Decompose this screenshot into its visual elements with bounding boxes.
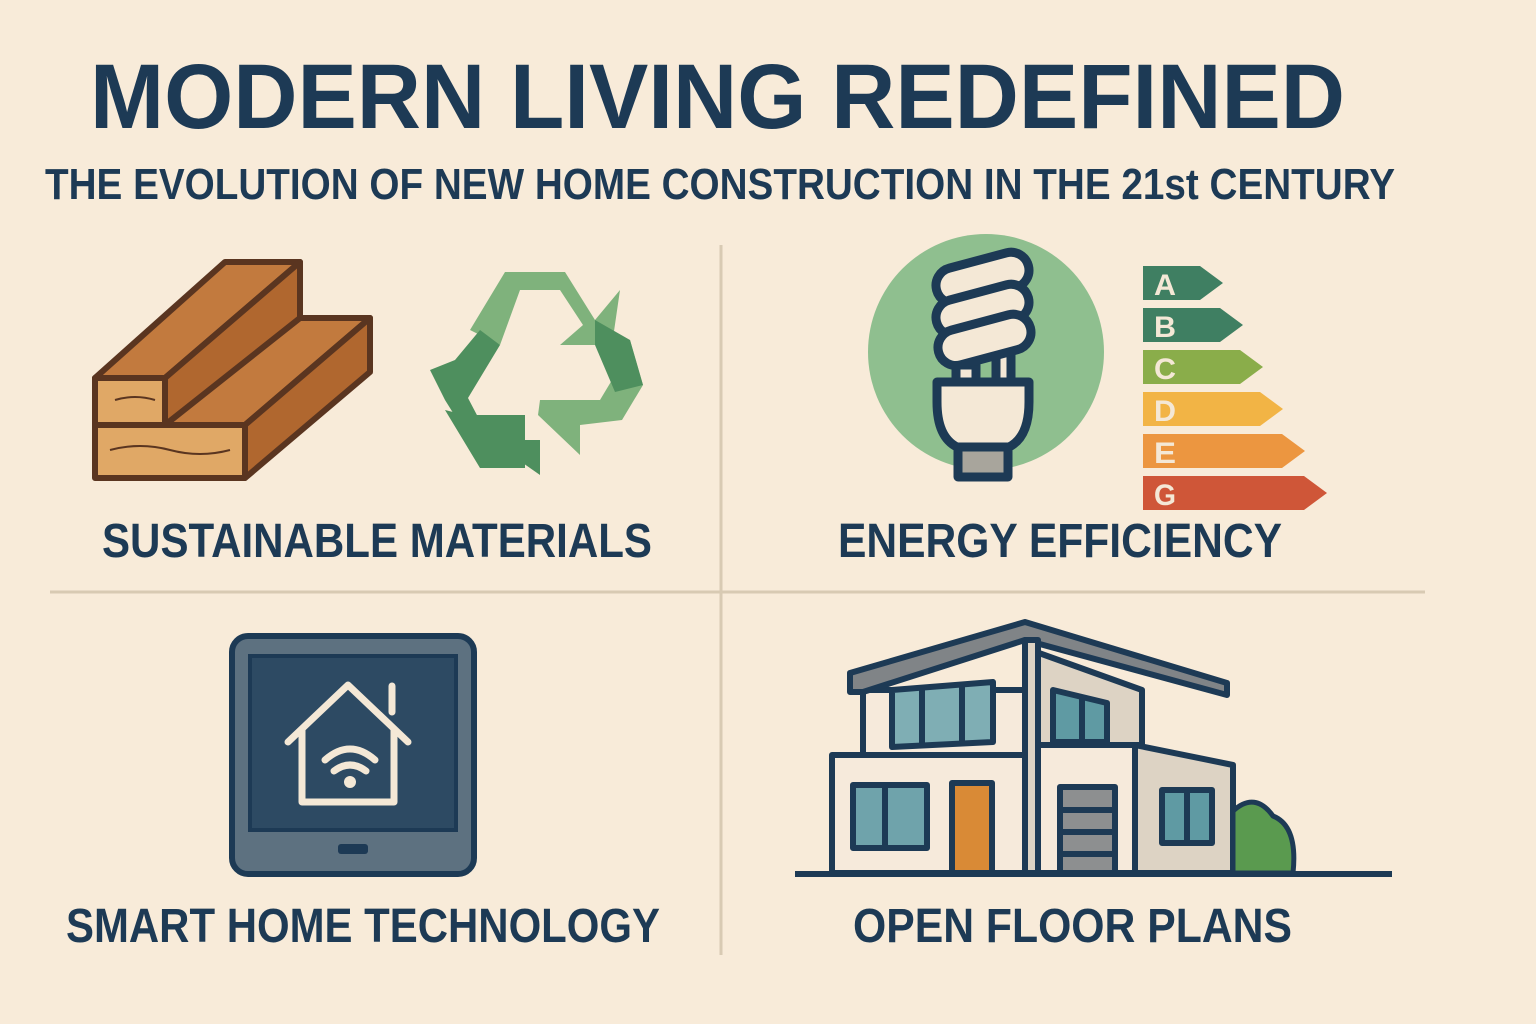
subtitle: THE EVOLUTION OF NEW HOME CONSTRUCTION IN THE 21st CENTURY <box>45 160 1395 209</box>
icon: smart home tablet <box>232 636 474 874</box>
icon: modern house <box>795 622 1392 874</box>
chart: energy rating bars: A <box>1154 269 1176 302</box>
chart: energy rating bars: B <box>1154 311 1176 344</box>
chart: energy rating bars: D <box>1154 395 1176 428</box>
label: energy efficiency: ENERGY EFFICIENCY <box>838 515 1282 568</box>
chart: energy rating bars <box>1143 266 1327 512</box>
label: smart home technology: SMART HOME TECHNOLOGY <box>66 900 660 953</box>
label: open floor plans: OPEN FLOOR PLANS <box>853 900 1292 953</box>
label: sustainable materials: SUSTAINABLE MATERIALS <box>102 515 652 568</box>
icon: light bulb <box>868 234 1104 477</box>
icon: recycle symbol <box>430 272 643 475</box>
title: MODERN LIVING REDEFINED <box>90 46 1345 148</box>
chart: energy rating bars: E <box>1154 437 1176 470</box>
chart: energy rating bars: G <box>1154 479 1176 512</box>
chart: energy rating bars: C <box>1154 353 1176 386</box>
icon: wood beams <box>95 262 370 478</box>
